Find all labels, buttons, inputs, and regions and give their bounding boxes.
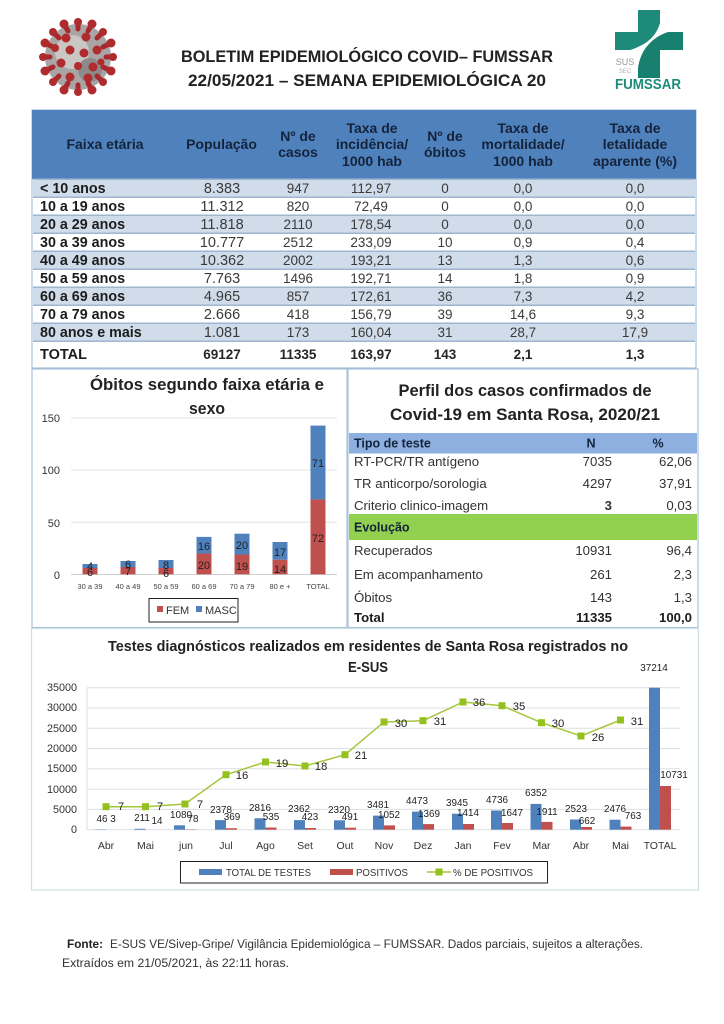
x axis labels xyxy=(98,840,677,852)
bar value labels: 1911 xyxy=(536,807,558,818)
line: percent positive xyxy=(102,698,624,810)
evolution rows: 10931 xyxy=(575,543,612,558)
table rows: 7,3 xyxy=(514,289,532,304)
table total row: TOTAL xyxy=(40,347,87,363)
source note: E-SUS VE/Sivep-Gripe/ Vigilância Epidemiológica – FUMSSAR. Dados parciais, sujeitos a alterações. xyxy=(110,939,643,951)
table total row: 11335 xyxy=(280,347,317,362)
chart title: E-SUS xyxy=(348,659,388,676)
table header: casos xyxy=(278,144,318,160)
bar value labels xyxy=(97,663,688,827)
test type rows: 3 xyxy=(605,498,612,513)
table rows: 233,09 xyxy=(350,235,392,250)
line value labels: 7 xyxy=(197,799,203,811)
table total row: 2,1 xyxy=(514,347,533,362)
bar value labels: 2476 xyxy=(604,804,626,815)
y axis and grid: 20000 xyxy=(47,743,77,755)
bar value labels: 2362 xyxy=(288,804,310,815)
test type header: % xyxy=(652,436,664,450)
x axis labels: Jan xyxy=(455,840,472,852)
panel: age table xyxy=(32,110,696,368)
line value labels: 26 xyxy=(592,732,604,744)
table title: Perfil dos casos confirmados de xyxy=(398,382,652,400)
evolution header: Evolução xyxy=(354,520,410,534)
chart title xyxy=(108,638,628,676)
line value labels xyxy=(118,697,643,813)
source note xyxy=(62,939,643,970)
bar value labels: 1414 xyxy=(457,808,479,819)
y axis and grid: 10000 xyxy=(47,784,77,796)
evolution rows xyxy=(354,543,692,625)
title xyxy=(181,47,553,90)
line value labels: 7 xyxy=(118,801,124,813)
table header: óbitos xyxy=(424,144,466,160)
y axis and grid: 150 xyxy=(42,413,60,425)
bar value labels: 19 xyxy=(236,561,248,573)
x axis labels: Mai xyxy=(137,840,154,852)
x axis labels: Mar xyxy=(532,840,551,852)
table title xyxy=(390,382,660,424)
bar value labels: 6 xyxy=(87,567,93,579)
stacked bars xyxy=(82,426,326,574)
evolution rows: Total xyxy=(354,610,385,625)
y axis and grid: 100 xyxy=(42,465,60,477)
chart title: Óbitos segundo faixa etária e xyxy=(90,375,324,394)
bar value labels: 535 xyxy=(263,812,280,823)
y axis and grid: 25000 xyxy=(47,723,77,735)
table header: Nº de xyxy=(427,128,463,144)
bar value labels: 3 xyxy=(110,814,116,825)
chart legend: FEM xyxy=(166,605,189,617)
y axis and grid: 0 xyxy=(71,824,77,836)
evolution rows: 2,3 xyxy=(674,567,692,582)
chart legend xyxy=(180,862,548,883)
bar value labels: 763 xyxy=(625,811,642,822)
bar value labels: 17 xyxy=(274,547,286,559)
panel: deaths chart xyxy=(32,369,347,628)
test type rows xyxy=(354,454,692,513)
table rows: 8.383 xyxy=(204,181,240,197)
table rows: 13 xyxy=(437,253,453,268)
table header: Faixa etária xyxy=(66,136,144,152)
evolution rows: 1,3 xyxy=(674,590,692,605)
line value labels: 19 xyxy=(276,758,288,770)
bar value labels: 1369 xyxy=(418,809,440,820)
x axis labels: TOTAL xyxy=(644,840,677,852)
table rows: 60 a 69 anos xyxy=(40,289,125,305)
x axis labels: 80 e + xyxy=(269,582,291,591)
evolution rows: Óbitos xyxy=(354,590,393,605)
icon: FUMSSAR logo: FUMSSAR xyxy=(615,77,681,93)
table rows: 0 xyxy=(441,217,449,232)
table rows: 0,4 xyxy=(626,235,645,250)
line value labels: 31 xyxy=(631,716,643,728)
bar value labels: 72 xyxy=(312,533,324,545)
x axis labels: Out xyxy=(337,840,354,852)
table rows: 11.818 xyxy=(200,217,244,233)
table rows: 947 xyxy=(287,181,309,196)
x axis labels: TOTAL xyxy=(306,582,330,591)
x axis labels: Abr xyxy=(573,840,590,852)
bar value labels: 4 xyxy=(87,561,93,573)
table total row xyxy=(40,347,645,363)
table rows: 418 xyxy=(287,307,309,322)
icon: FUMSSAR logo: SUS xyxy=(616,57,634,67)
table rows: 7.763 xyxy=(204,271,240,287)
chart legend: MASC xyxy=(205,605,237,617)
table rows: 1,8 xyxy=(514,271,532,286)
table rows: 4.965 xyxy=(204,289,240,305)
bar value labels: 78 xyxy=(188,814,199,825)
x axis labels: 60 a 69 xyxy=(191,582,217,591)
table rows: 160,04 xyxy=(350,325,392,340)
table rows: 0 xyxy=(441,199,449,214)
bar value labels xyxy=(87,458,324,580)
x axis labels: 30 a 39 xyxy=(77,582,103,591)
test type header: N xyxy=(586,436,596,450)
table rows: 0,0 xyxy=(514,199,532,214)
bar value labels: 2320 xyxy=(328,805,350,816)
table total row: 143 xyxy=(434,347,457,362)
bar value labels: 6 xyxy=(125,559,131,571)
bar value labels: 1080 xyxy=(170,810,192,821)
x axis labels: Set xyxy=(297,840,313,852)
table header: Taxa de xyxy=(497,120,549,136)
table rows: 2110 xyxy=(283,217,313,232)
bar value labels: 211 xyxy=(134,813,150,824)
test type rows: 4297 xyxy=(583,476,612,491)
table rows: 0,0 xyxy=(514,181,532,196)
test type rows: Criterio clinico-imagem xyxy=(354,498,488,513)
bar value labels: 20 xyxy=(236,540,248,552)
x axis labels: Mai xyxy=(612,840,629,852)
table rows: 0,6 xyxy=(626,253,644,268)
table rows: 857 xyxy=(287,289,309,304)
evolution rows: Em acompanhamento xyxy=(354,567,483,582)
x axis labels: Nov xyxy=(375,840,394,852)
evolution rows: 100,0 xyxy=(659,610,692,625)
line value labels: 31 xyxy=(434,716,446,728)
table rows: 820 xyxy=(287,199,309,214)
chart title xyxy=(90,375,324,418)
bar value labels: 662 xyxy=(579,816,595,827)
table rows: 36 xyxy=(437,289,453,304)
table header: 1000 hab xyxy=(493,153,553,169)
table total row: 1,3 xyxy=(626,347,645,362)
table rows: 10.362 xyxy=(200,253,244,269)
table rows: 0,0 xyxy=(626,199,644,214)
table rows: 0,9 xyxy=(514,235,532,250)
table rows: 2002 xyxy=(283,253,313,268)
source note: Extraídos em 21/05/2021, às 22:11 horas. xyxy=(62,958,289,970)
table rows: 10 a 19 anos xyxy=(40,199,125,215)
panel: case profile table xyxy=(348,369,698,628)
line value labels: 18 xyxy=(315,761,327,773)
bar value labels: 7 xyxy=(125,566,131,578)
table rows: 70 a 79 anos xyxy=(40,307,125,323)
table rows: 28,7 xyxy=(510,325,536,340)
table rows: 50 a 59 anos xyxy=(40,271,125,287)
table rows: 1.081 xyxy=(204,325,240,341)
table header xyxy=(32,110,696,179)
table header: letalidade xyxy=(603,136,667,152)
table rows: 0,0 xyxy=(514,217,532,232)
table rows: 192,71 xyxy=(350,271,392,286)
bar value labels: 6352 xyxy=(525,788,547,799)
y axis and grid: 50 xyxy=(48,518,60,530)
table total row: 163,97 xyxy=(350,347,392,362)
table rows: 14,6 xyxy=(510,307,536,322)
table rows: 20 a 29 anos xyxy=(40,217,125,233)
table rows: 31 xyxy=(437,325,453,340)
y axis and grid: 5000 xyxy=(53,804,77,816)
line value labels: 16 xyxy=(236,770,248,782)
chart legend: POSITIVOS xyxy=(356,867,408,879)
bar value labels: 491 xyxy=(342,812,359,823)
table rows: 172,61 xyxy=(350,289,392,304)
table rows: 4,2 xyxy=(626,289,644,304)
table rows: 14 xyxy=(437,271,453,286)
test type header: Tipo de teste xyxy=(354,436,431,450)
table rows xyxy=(40,181,648,341)
bar value labels: 4473 xyxy=(406,796,428,807)
table rows: 178,54 xyxy=(350,217,392,232)
table title: Covid-19 em Santa Rosa, 2020/21 xyxy=(390,406,660,424)
x axis labels: jun xyxy=(178,840,193,852)
x axis labels: 50 a 59 xyxy=(153,582,179,591)
table rows: 39 xyxy=(437,307,453,322)
chart title: Testes diagnósticos realizados em residentes de Santa Rosa registrados no xyxy=(108,638,628,655)
bar value labels: 3481 xyxy=(367,800,389,811)
y axis and grid: 30000 xyxy=(47,702,77,714)
bars: positives xyxy=(185,786,671,830)
x axis labels: Abr xyxy=(98,840,115,852)
table rows: 0 xyxy=(441,181,449,196)
bar value labels: 2816 xyxy=(249,803,271,814)
table rows: 80 anos e mais xyxy=(40,325,142,341)
bar value labels: 10731 xyxy=(660,770,688,781)
x axis labels: 70 a 79 xyxy=(229,582,255,591)
chart legend xyxy=(149,598,238,622)
y axis and grid: 35000 xyxy=(47,682,77,694)
bar value labels: 37214 xyxy=(640,663,668,674)
table rows: 0,0 xyxy=(626,181,644,196)
bar value labels: 14 xyxy=(152,816,163,827)
bar value labels: 3945 xyxy=(446,798,468,809)
table rows: 11.312 xyxy=(200,199,244,215)
evolution rows: 261 xyxy=(590,567,612,582)
x axis labels: Jul xyxy=(219,840,233,852)
test type rows: TR anticorpo/sorologia xyxy=(354,476,487,491)
title: 22/05/2021 – SEMANA EPIDEMIOLÓGICA 20 xyxy=(188,71,546,90)
evolution header xyxy=(349,514,697,540)
bar value labels: 20 xyxy=(198,560,210,572)
chart legend: TOTAL DE TESTES xyxy=(226,867,311,879)
source note: Fonte: xyxy=(67,939,103,951)
table rows: 10 xyxy=(437,235,453,250)
table rows: 1496 xyxy=(283,271,313,286)
icon: FUMSSAR logo: SEC xyxy=(619,69,632,75)
table rows: 0,0 xyxy=(626,217,644,232)
bar value labels: 369 xyxy=(224,812,241,823)
table rows: 112,97 xyxy=(351,181,391,196)
x axis labels: 40 a 49 xyxy=(115,582,141,591)
line value labels: 7 xyxy=(157,801,163,813)
bar value labels: 1052 xyxy=(378,810,400,821)
bar value labels: 1647 xyxy=(501,808,523,819)
table header: aparente (%) xyxy=(593,153,677,169)
table total row: 69127 xyxy=(203,347,241,362)
evolution rows: 11335 xyxy=(576,610,612,625)
icon: coronavirus xyxy=(39,18,117,96)
icon: FUMSSAR logo xyxy=(615,10,683,93)
table header: População xyxy=(186,136,257,152)
table row bands xyxy=(33,178,695,342)
bars: total tests xyxy=(95,688,660,830)
table rows: 173 xyxy=(287,325,309,340)
bar value labels: 71 xyxy=(312,458,324,470)
y axis and grid: 0 xyxy=(54,570,60,582)
test type rows: 62,06 xyxy=(659,454,692,469)
chart title: sexo xyxy=(189,400,225,418)
bar value labels: 4736 xyxy=(486,795,508,806)
table rows: 30 a 39 anos xyxy=(40,235,125,251)
y axis and grid xyxy=(42,413,337,582)
x axis labels: Ago xyxy=(256,840,275,852)
bar value labels: 423 xyxy=(302,812,319,823)
table header: Nº de xyxy=(280,128,316,144)
test type rows: 7035 xyxy=(583,454,612,469)
y axis and grid: 15000 xyxy=(47,763,77,775)
table rows: 9,3 xyxy=(626,307,644,322)
table rows: < 10 anos xyxy=(40,181,106,197)
bar value labels: 2378 xyxy=(210,805,232,816)
evolution rows: 143 xyxy=(590,590,612,605)
line value labels: 35 xyxy=(513,701,525,713)
table rows: 2.666 xyxy=(204,307,240,323)
table rows: 1,3 xyxy=(514,253,532,268)
title: BOLETIM EPIDEMIOLÓGICO COVID– FUMSSAR xyxy=(181,47,553,66)
x axis labels: Fev xyxy=(493,840,511,852)
chart legend: % DE POSITIVOS xyxy=(453,867,533,879)
table header: Taxa de xyxy=(346,120,398,136)
table header: 1000 hab xyxy=(342,153,402,169)
table rows: 2512 xyxy=(283,235,313,250)
test type rows: 37,91 xyxy=(659,476,692,491)
table rows: 17,9 xyxy=(622,325,648,340)
evolution rows: 96,4 xyxy=(666,543,692,558)
table header: incidência/ xyxy=(336,136,408,152)
bar value labels: 8 xyxy=(163,560,169,572)
x axis labels: Dez xyxy=(414,840,432,852)
bar value labels: 14 xyxy=(274,564,286,576)
panel: diagnostic tests chart xyxy=(32,628,698,890)
x axis labels xyxy=(77,582,330,591)
table rows: 0,9 xyxy=(626,271,644,286)
test type rows: RT-PCR/TR antígeno xyxy=(354,454,479,469)
line value labels: 30 xyxy=(395,718,407,730)
table rows: 193,21 xyxy=(350,253,392,268)
line value labels: 36 xyxy=(473,697,485,709)
table rows: 40 a 49 anos xyxy=(40,253,125,269)
y axis and grid xyxy=(47,682,680,836)
evolution rows: Recuperados xyxy=(354,543,433,558)
line value labels: 30 xyxy=(552,718,564,730)
table rows: 156,79 xyxy=(350,307,392,322)
bar value labels: 46 xyxy=(97,814,108,825)
test type rows: 0,03 xyxy=(666,498,692,513)
bar value labels: 16 xyxy=(198,541,210,553)
line value labels: 21 xyxy=(355,750,367,762)
table rows: 72,49 xyxy=(354,199,388,214)
table rows: 10.777 xyxy=(200,235,244,251)
table header: mortalidade/ xyxy=(481,136,565,152)
bar value labels: 6 xyxy=(163,568,169,580)
table header: Taxa de xyxy=(609,120,661,136)
bar value labels: 2523 xyxy=(565,804,587,815)
test type header xyxy=(349,433,697,454)
